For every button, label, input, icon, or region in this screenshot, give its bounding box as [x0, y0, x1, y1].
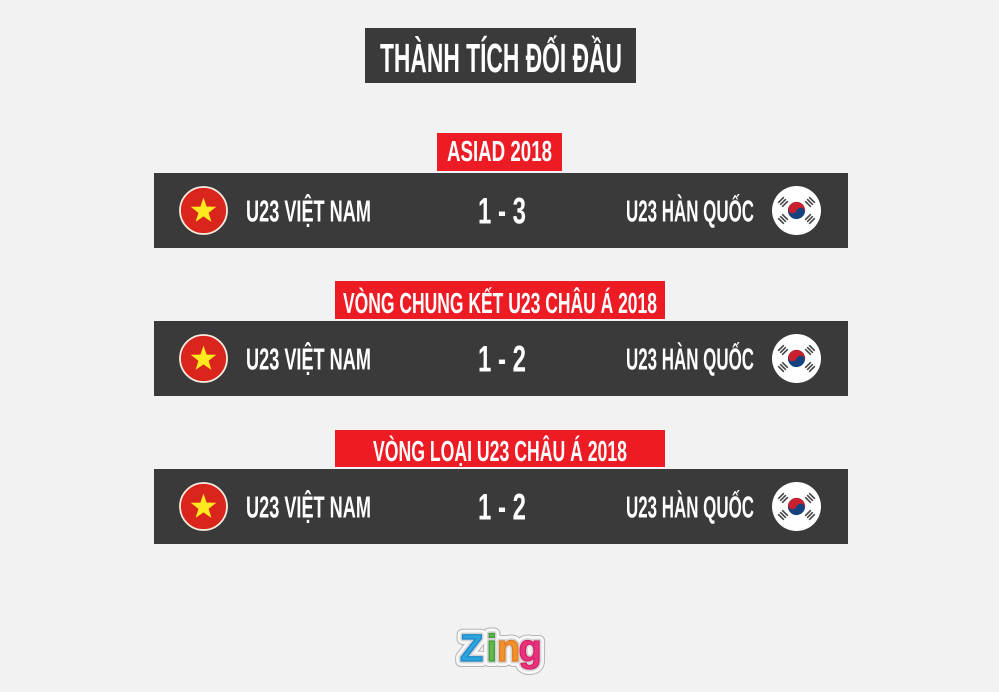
icon: Vietnam flag [180, 187, 227, 234]
score: 1 - 2: 1 - 2 [478, 486, 526, 528]
icon: Vietnam flag [180, 483, 227, 530]
logo: Zing: Zing [460, 628, 542, 670]
heading: Vòng chung kết U23 châu Á 2018 [335, 281, 665, 320]
logo: Zing: Zing [460, 628, 542, 670]
logo: Zing: Zing [460, 628, 542, 670]
team: U23 Hàn Quốc: U23 HÀN QUỐC [626, 488, 754, 524]
panel: match VCK U23 châu Á 2018 [154, 321, 848, 396]
heading: ASIAD 2018 [437, 133, 562, 171]
logo: Zing: Zing [460, 628, 542, 670]
team: U23 Việt Nam: U23 VIỆT NAM [246, 488, 371, 524]
title: THÀNH TÍCH ĐỐI ĐẦU [380, 35, 622, 81]
heading: Vòng loại U23 châu Á 2018: VÒNG LOẠI U23 CHÂU Á 2018 [373, 434, 627, 468]
heading: Vòng chung kết U23 châu Á 2018: VÒNG CHUNG KẾT U23 CHÂU Á 2018 [343, 286, 657, 320]
icon: South Korea flag [772, 334, 821, 383]
team: U23 Việt Nam: U23 VIỆT NAM [246, 192, 371, 228]
team: U23 Việt Nam: U23 VIỆT NAM [246, 340, 371, 376]
icon: Vietnam flag [180, 335, 227, 382]
icon: South Korea flag [772, 482, 821, 531]
panel: match vòng loại U23 châu Á 2018 [154, 469, 848, 544]
icon: South Korea flag [772, 186, 821, 235]
team: U23 Hàn Quốc: U23 HÀN QUỐC [626, 192, 754, 228]
title [365, 28, 636, 83]
team: U23 Hàn Quốc: U23 HÀN QUỐC [626, 340, 754, 376]
score: 1 - 3: 1 - 3 [478, 190, 526, 232]
heading: Vòng loại U23 châu Á 2018 [335, 430, 665, 468]
score: 1 - 2: 1 - 2 [478, 338, 526, 380]
heading: ASIAD 2018: ASIAD 2018 [447, 136, 552, 168]
panel: match ASIAD 2018 [154, 173, 848, 248]
